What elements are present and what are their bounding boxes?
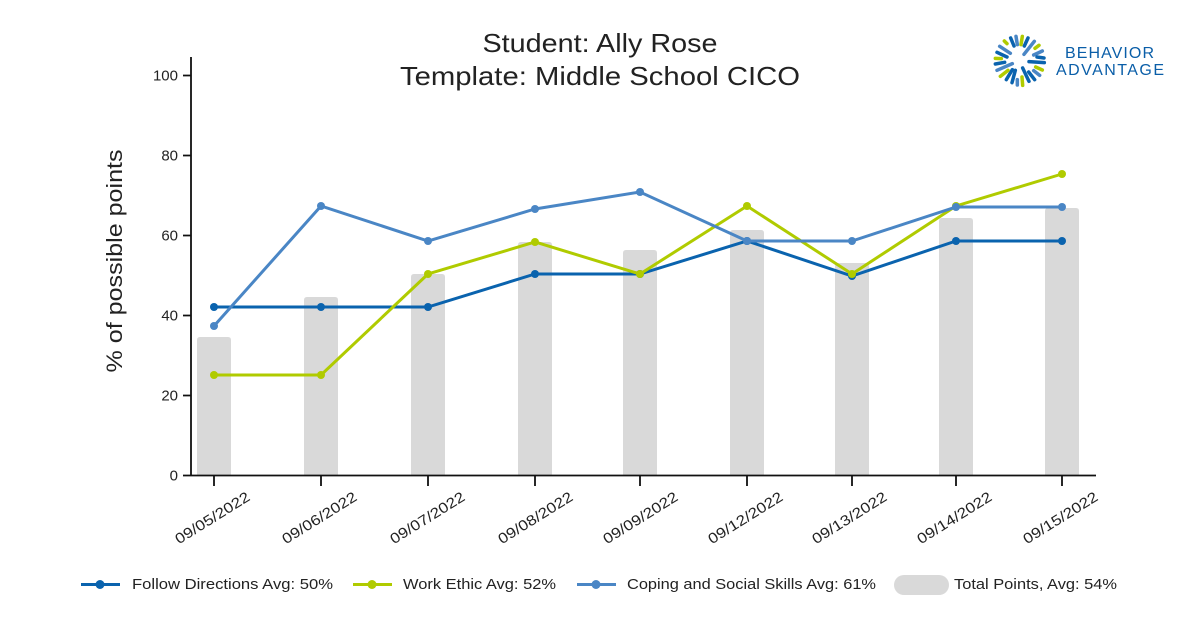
logo wordmark: ADVANTAGE (1056, 62, 1164, 79)
line: Work Ethic (210, 170, 1066, 379)
x-axis date labels (173, 489, 1101, 548)
title: Student: Ally Rose (482, 28, 718, 58)
x-axis date labels: 09/14/2022 (915, 489, 995, 548)
logo: Behavior Advantage (995, 36, 1164, 85)
logo wordmark: BEHAVIOR (1065, 45, 1154, 62)
legend: Work Ethic (353, 576, 556, 593)
logo wordmark (1056, 45, 1164, 79)
title (400, 28, 800, 91)
legend (81, 575, 1117, 595)
x-axis date labels: 09/15/2022 (1021, 489, 1101, 548)
x-axis date labels: 09/07/2022 (388, 489, 468, 548)
legend: Follow Directions: Follow Directions Avg: 50% (132, 576, 333, 593)
y axis (153, 57, 191, 484)
y-axis tick labels: 20 (161, 388, 178, 404)
total points bars (197, 208, 1079, 475)
x-axis date labels: 09/08/2022 (496, 489, 576, 548)
y-axis title: % of possible points (102, 150, 127, 372)
x-axis date labels: 09/05/2022 (173, 489, 253, 548)
x-axis date labels: 09/13/2022 (810, 489, 890, 548)
y-axis tick labels: 40 (161, 308, 178, 324)
x-axis date labels: 09/12/2022 (706, 489, 786, 548)
x axis (173, 475, 1101, 548)
icon: logo starburst (995, 36, 1044, 85)
line: Coping and Social Skills (210, 188, 1066, 330)
y-axis tick labels: 0 (170, 468, 178, 484)
legend: Work Ethic: Work Ethic Avg: 52% (403, 576, 556, 593)
y-axis tick labels (153, 68, 178, 484)
y-axis tick labels: 60 (161, 228, 178, 244)
title: Template: Middle School CICO (400, 61, 800, 91)
y-axis tick labels: 80 (161, 148, 178, 164)
x-axis date labels: 09/09/2022 (601, 489, 681, 548)
legend: Total Points (894, 575, 1117, 595)
y-axis tick labels: 100 (153, 68, 178, 84)
x-axis date labels: 09/06/2022 (280, 489, 360, 548)
legend: Coping and Social Skills: Coping and Social Skills Avg: 61% (627, 576, 876, 593)
legend: Total Points: Total Points, Avg: 54% (954, 576, 1117, 593)
line: Follow Directions (210, 237, 1066, 311)
